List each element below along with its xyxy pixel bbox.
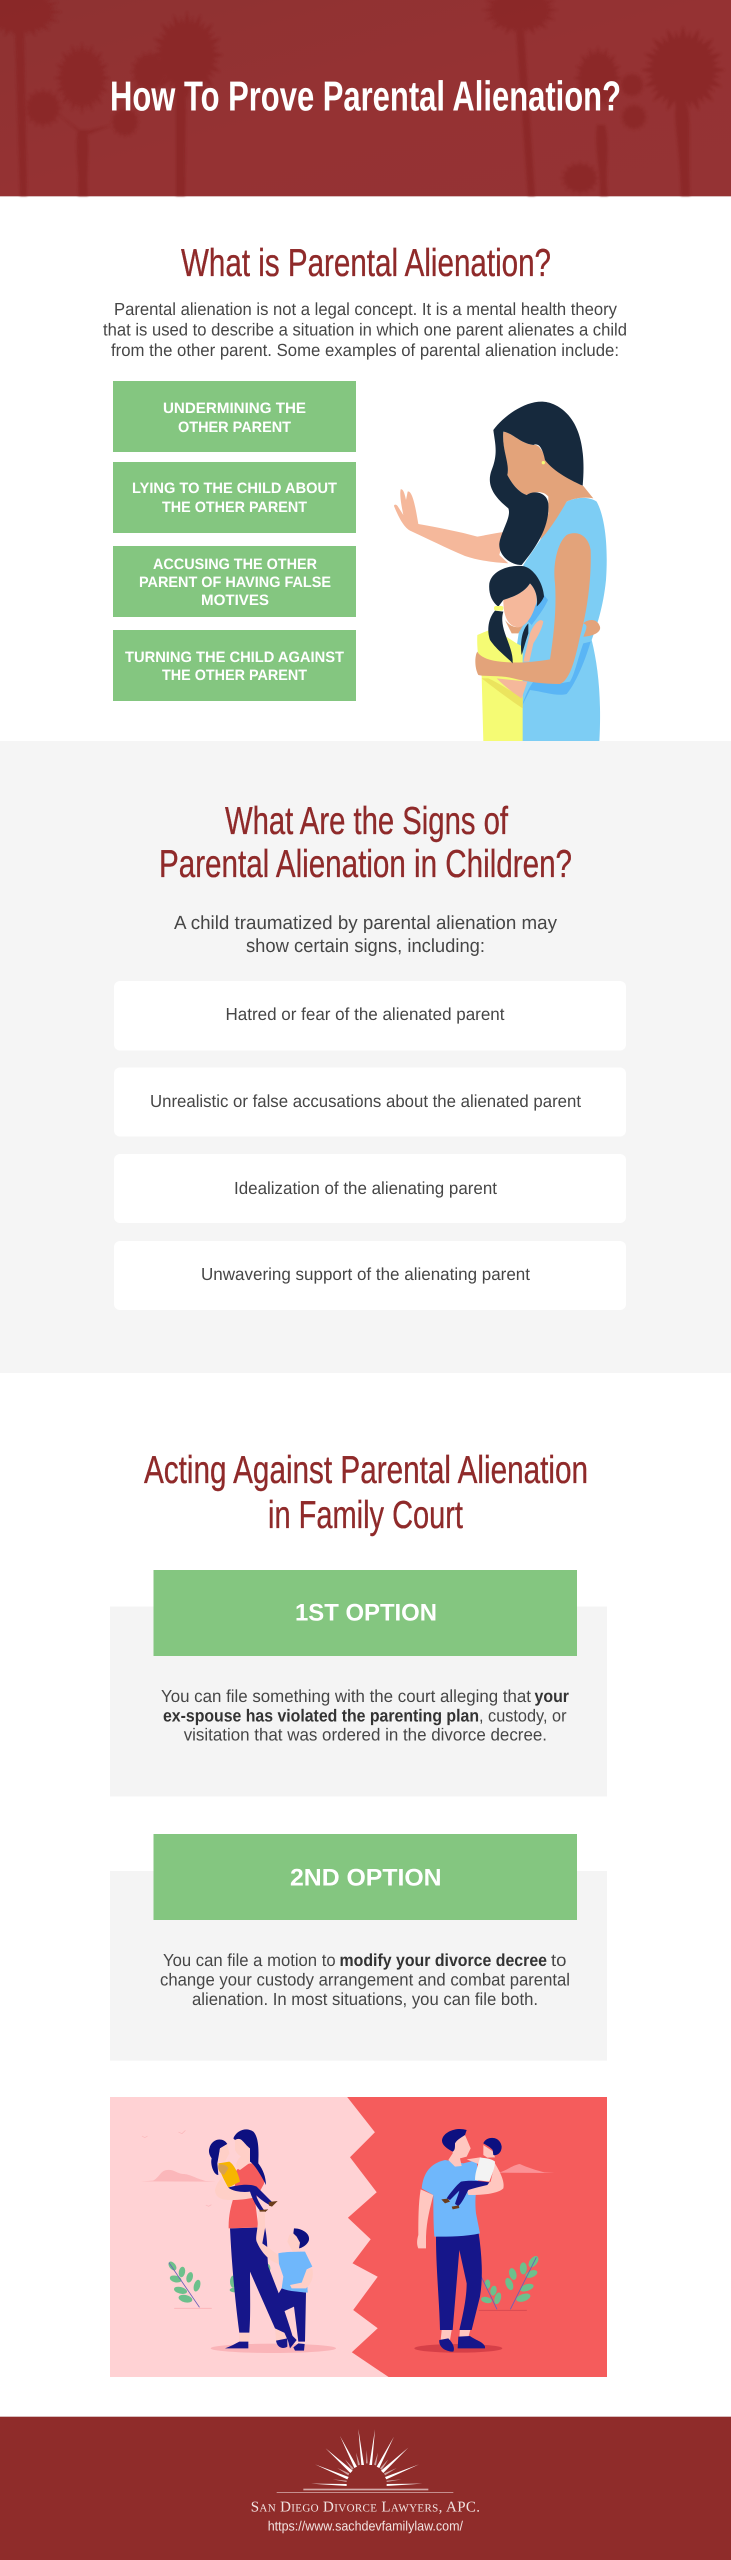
example box 3: ACCUSING THE OTHER: [153, 556, 317, 573]
option 2 label: 2ND OPTION: [290, 1864, 442, 1892]
section: signs of parental alienation: [0, 741, 731, 1373]
illustration: mother hugging daughter: [394, 402, 607, 742]
option 1 text: visitation that was ordered in the divorce decree.: [184, 1725, 547, 1745]
sign card 4: [114, 1241, 626, 1310]
sign card 2: Unrealistic or false accusations about the alienated parent: [150, 1091, 581, 1111]
sign card 4: Unwavering support of the alienating parent: [201, 1264, 530, 1284]
intro paragraph: show certain signs, including:: [246, 936, 485, 957]
sign card 1: [114, 981, 626, 1050]
section: acting against parental alienation: [110, 1449, 607, 2377]
section heading: [159, 800, 572, 886]
intro paragraph: [174, 913, 557, 957]
firm name: San Diego Divorce Lawyers, APC.: [251, 2500, 480, 2516]
example box 2: [113, 462, 356, 533]
option 2 panel: [110, 1834, 607, 2061]
intro paragraph: that is used to describe a situation in which one parent alienates a child: [103, 320, 627, 340]
logo: rising sun: [277, 2429, 453, 2493]
website url: https://www.sachdevfamilylaw.com/: [268, 2518, 463, 2534]
figures: mother with children: [209, 2129, 336, 2353]
option 2 text: alienation. In most situations, you can file both.: [192, 1989, 538, 2009]
example box 3: PARENT OF HAVING FALSE: [139, 574, 331, 591]
section heading: [144, 1449, 588, 1537]
example box 1: OTHER PARENT: [178, 419, 291, 436]
section heading: Parental Alienation in Children?: [159, 843, 572, 886]
option 2 text: modify your divorce decree: [340, 1950, 547, 1970]
option 2 text: [160, 1950, 570, 2009]
intro paragraph: [103, 299, 627, 360]
section heading: What is Parental Alienation?: [181, 242, 551, 285]
option 1 text: ex-spouse has violated the parenting plan: [163, 1705, 479, 1725]
option 1 panel: [110, 1570, 607, 1796]
sign card 1: Hatred or fear of the alienated parent: [226, 1004, 505, 1024]
section heading: in Family Court: [268, 1494, 463, 1537]
option 1 text: , custody, or: [479, 1705, 567, 1725]
example box 3: MOTIVES: [201, 592, 269, 609]
section heading: Acting Against Parental Alienation: [144, 1449, 588, 1492]
example box 2: LYING TO THE CHILD ABOUT: [132, 480, 337, 497]
option 1 text: You can file something with the court alleging that: [161, 1686, 531, 1706]
example box 2: THE OTHER PARENT: [162, 499, 307, 516]
option 1 text: [161, 1686, 569, 1745]
example box 4: TURNING THE CHILD AGAINST: [125, 649, 344, 666]
section heading: What Are the Signs of: [225, 800, 508, 843]
example box 4: [113, 630, 356, 701]
intro paragraph: A child traumatized by parental alienation may: [174, 913, 557, 934]
sign card 3: Idealization of the alienating parent: [234, 1178, 497, 1198]
example box 1: UNDERMINING THE: [163, 400, 306, 417]
sign card 3: [114, 1154, 626, 1223]
figures: father with child: [414, 2129, 504, 2353]
section: what is parental alienation: [103, 242, 627, 742]
option 2 text: You can file a motion to: [163, 1950, 336, 1970]
illustration: separated family: [110, 2097, 607, 2377]
header banner: [0, 0, 731, 197]
example box 4: THE OTHER PARENT: [162, 667, 307, 684]
palm tree silhouettes: [0, 0, 727, 196]
option 2 text: to: [551, 1950, 566, 1970]
option 1 text: your: [534, 1686, 569, 1706]
example box 3: [113, 546, 356, 617]
option 2 text: change your custody arrangement and combat parental: [160, 1970, 570, 1990]
footer: [0, 2416, 731, 2560]
scenery: clouds and plants: [141, 2130, 555, 2310]
intro paragraph: from the other parent. Some examples of parental alienation include:: [111, 340, 619, 360]
example box 1: [113, 381, 356, 452]
intro paragraph: Parental alienation is not a legal concept. It is a mental health theory: [114, 299, 617, 319]
option 1 label: 1ST OPTION: [295, 1600, 437, 1627]
sign card 2: [114, 1068, 626, 1136]
